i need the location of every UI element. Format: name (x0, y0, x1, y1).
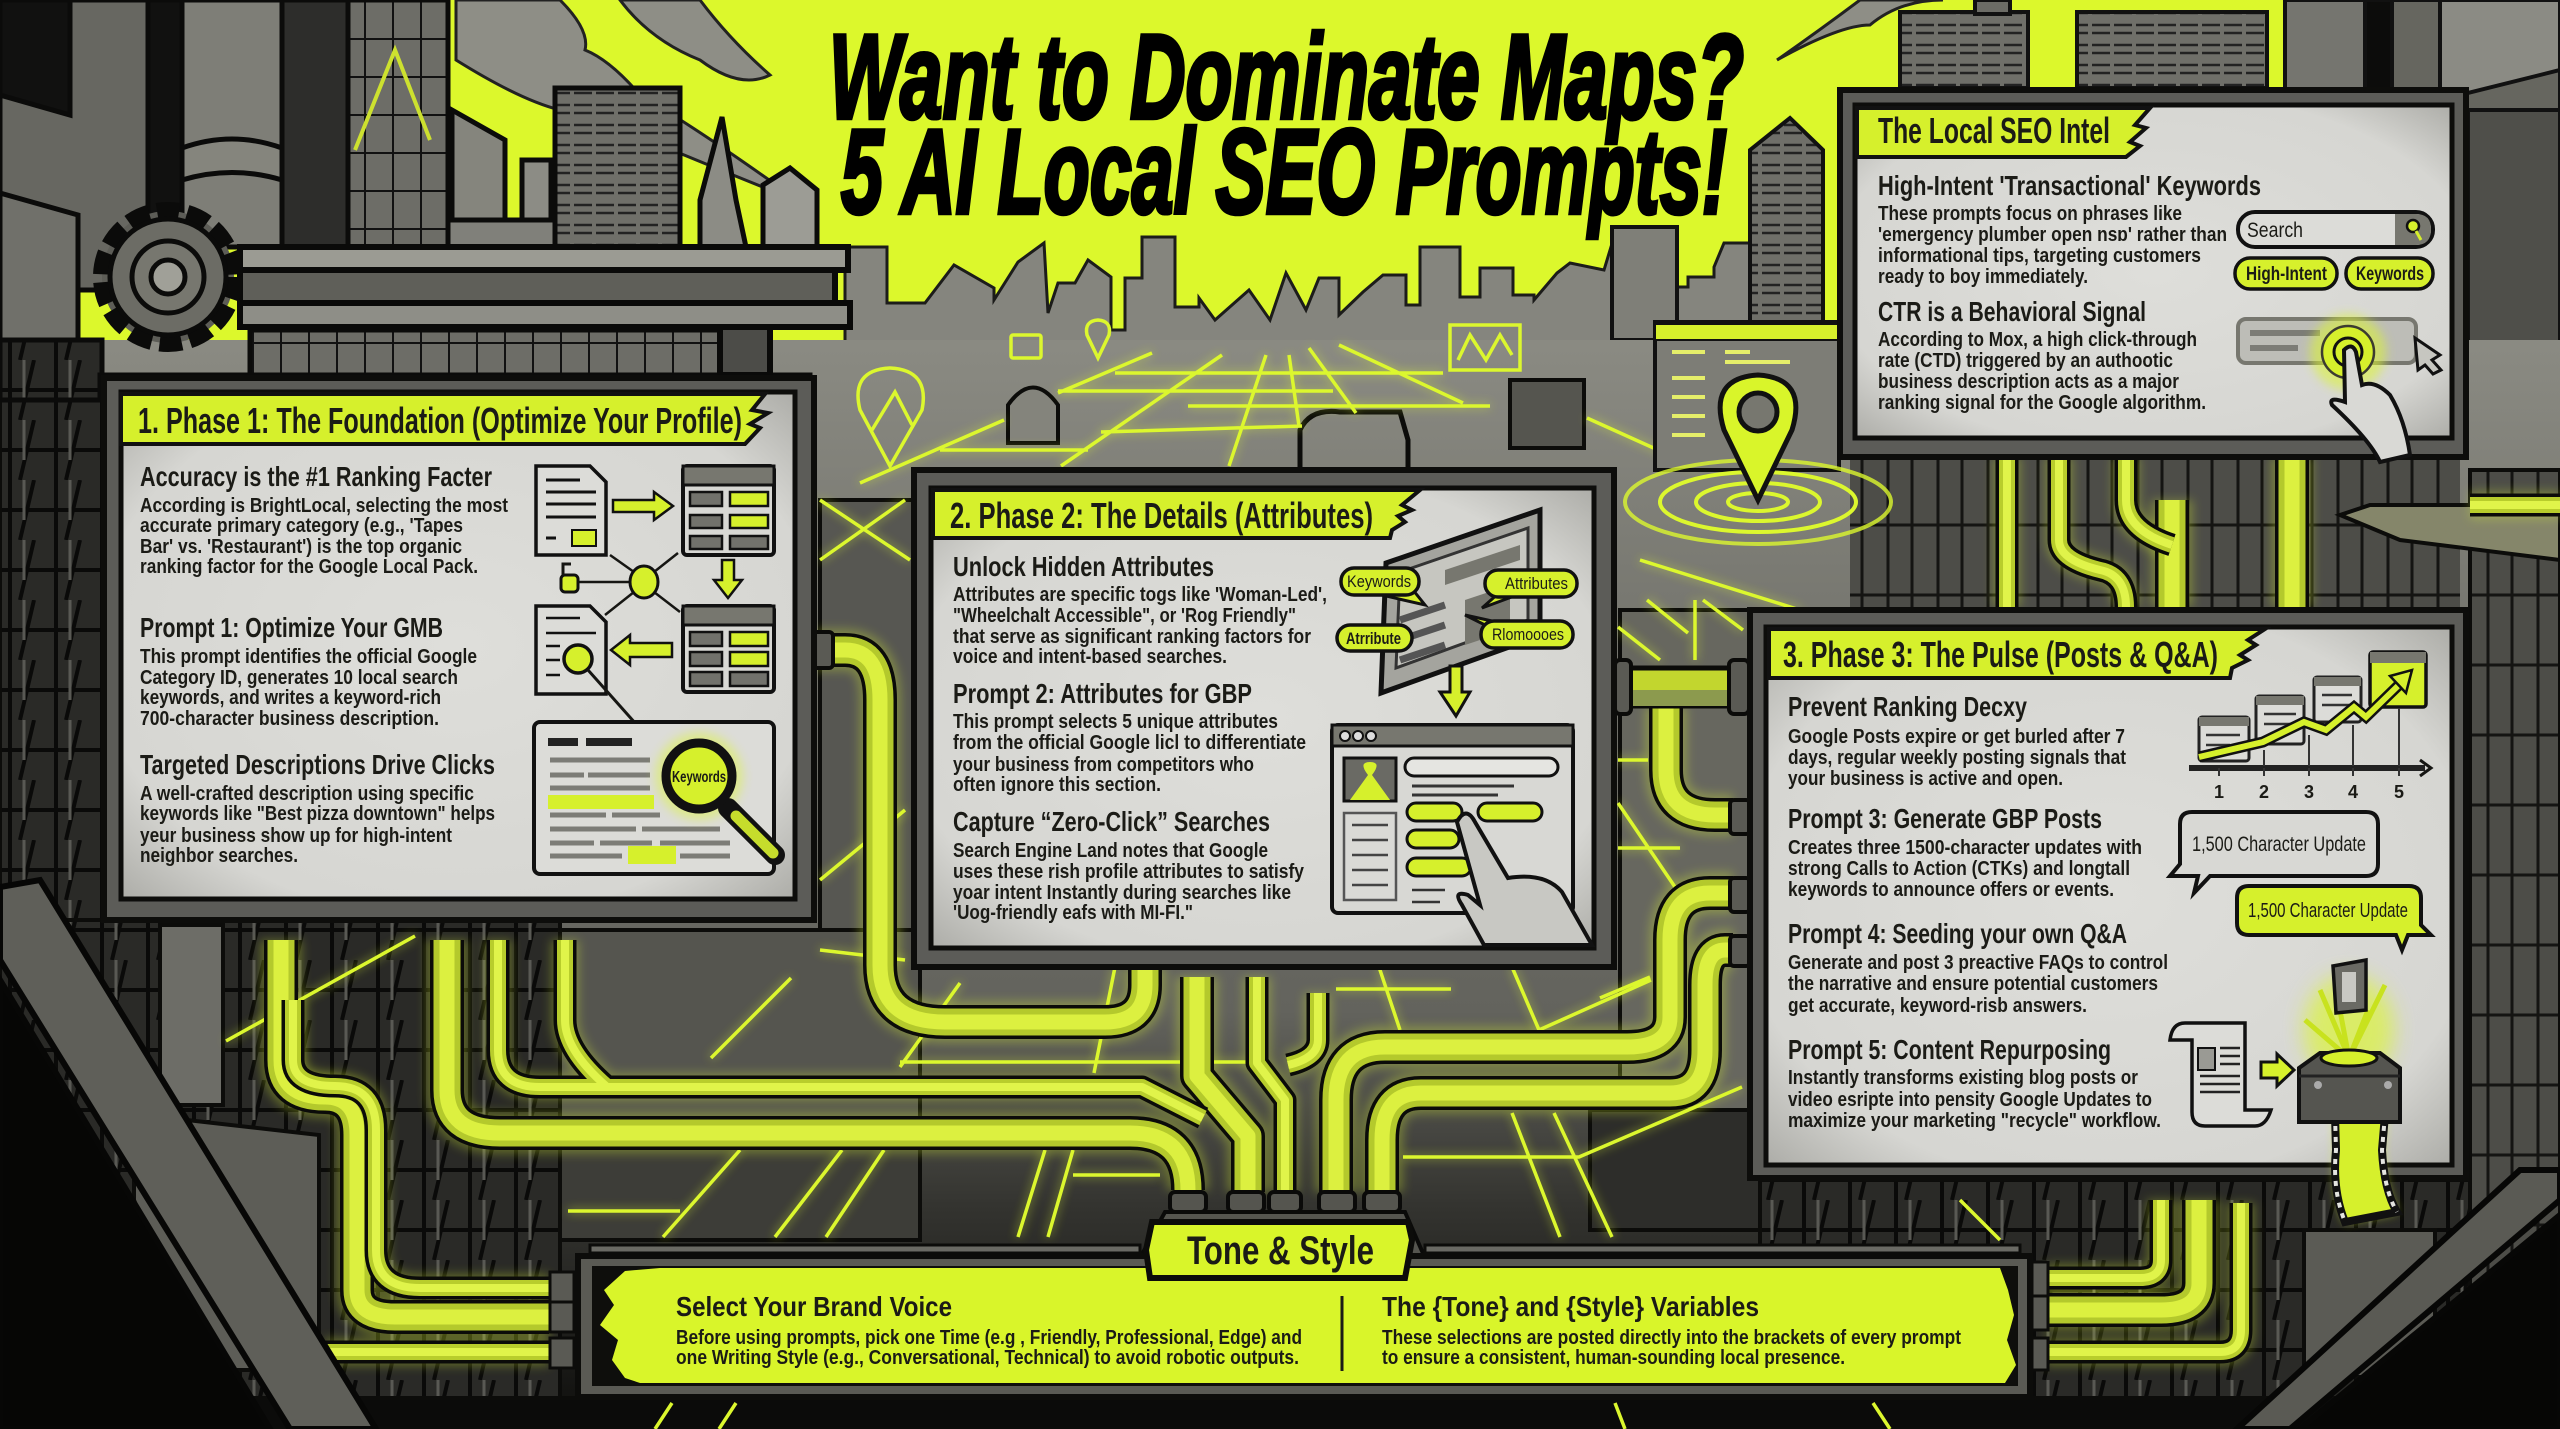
icon: profile browser with tapping hand (1332, 725, 1592, 945)
title: Want to Dominate Maps? (829, 10, 1744, 144)
text block: tone and style variables: These selections are posted directly into the brackets of every prompt (1382, 1327, 1961, 1349)
text block: Prompt 2 (953, 678, 1306, 796)
icon: click on result card (2238, 314, 2441, 462)
icon: attribute window with tag bubbles (1337, 510, 1577, 693)
text block: Prompt 4 (1788, 918, 2168, 1017)
text block: Prompt 4: Generate and post 3 preactive FAQs to control (1788, 952, 2168, 974)
text block: prevent ranking decay: days, regular weekly posting signals that (1788, 747, 2126, 769)
label: Tone & Style (1146, 1222, 1412, 1278)
text block: high-intent keywords: High-Intent 'Transactional' Keywords (1878, 170, 2261, 201)
text block: targeted descriptions: keywords like "Best pizza downtown" helps (140, 803, 495, 825)
text block: Prompt 1: keywords, and writes a keyword-rich (140, 687, 441, 709)
text block: unlock hidden attributes: that serve as significant ranking factors for (953, 626, 1311, 648)
text block: prevent ranking decay (1788, 691, 2126, 790)
chart: rising posts timeline (2189, 652, 2431, 802)
text block: accuracy ranking factor: Accuracy is the #1 Ranking Facter (140, 461, 492, 492)
text block: Prompt 5: Instantly transforms existing blog posts or (1788, 1067, 2138, 1089)
pipe manifold above tone label (1140, 1192, 1425, 1258)
panel header: The Local SEO Intel (1857, 108, 2150, 157)
yellow brush-edged band (600, 1268, 2016, 1383)
text block: Prompt 4: the narrative and ensure potential customers (1788, 973, 2158, 995)
panel header: Phase 3 (1769, 629, 2265, 678)
icon: search box (2238, 212, 2433, 247)
text block: Prompt 2: often ignore this section. (953, 774, 1161, 796)
speech bubble: 1,500 character update yellow: 1,500 Character Update (2248, 900, 2408, 922)
text block: tone and style variables (1382, 1291, 1961, 1369)
text block: accuracy ranking factor: accurate primary category (e.g., 'Tapes (140, 515, 463, 537)
text block: zero-click searches: Capture “Zero-Click” Searches (953, 806, 1270, 837)
arrow: down (1440, 666, 1470, 716)
text block: select your brand voice (676, 1291, 1302, 1369)
text block: Prompt 3: Creates three 1500-character updates with (1788, 837, 2142, 859)
text block: CTR is a behavioral signal: CTR is a Behavioral Signal (1878, 296, 2146, 327)
text block: Prompt 4: Prompt 4: Seeding your own Q&A (1788, 918, 2127, 949)
foreground girders (0, 880, 2560, 1429)
text block: tone and style variables: The {Tone} and {Style} Variables (1382, 1291, 1759, 1322)
distant city skyline (845, 227, 1751, 420)
glowing pipes (281, 457, 2560, 1352)
panel: Tone & Style bar (550, 1222, 2048, 1397)
text block: high-intent keywords: These prompts focus on phrases like (1878, 203, 2182, 225)
icon: script scroll (2170, 1023, 2271, 1126)
ground plane (0, 340, 2560, 1429)
text block: prevent ranking decay: Google Posts expire or get burled after 7 (1788, 726, 2125, 748)
panel header: Phase 1 (121, 394, 768, 444)
mid ground machinery blocks (0, 380, 2560, 1429)
text block: Prompt 4: get accurate, keyword-risb answers. (1788, 995, 2087, 1017)
text block: Prompt 5: maximize your marketing "recycle" workflow. (1788, 1110, 2161, 1132)
text block: unlock hidden attributes: "Wheelchalt Accessible", or 'Rog Friendly" (953, 605, 1296, 627)
perspective road grid lines (226, 345, 2000, 1429)
browser window behind pin (1655, 322, 1839, 470)
text block: high-intent keywords: 'emergency plumber open nsɒ' rather than (1878, 224, 2227, 246)
smoke clouds (456, 0, 1943, 202)
text block: zero-click searches: 'Uog-friendly eafs with MI-FI." (953, 902, 1193, 924)
text block: accuracy ranking factor: Bar' vs. 'Restaurant') is the top organic (140, 536, 462, 558)
title: 5 AI Local SEO Prompts! (841, 105, 1727, 239)
pipe collars on bar edges (550, 1262, 2048, 1370)
icon: attribute window with tag bubbles: Rlomoooes (1492, 625, 1564, 644)
left industrial building (0, 0, 817, 400)
title (829, 10, 1744, 239)
text block: targeted descriptions (140, 749, 495, 867)
text block: Prompt 2: Prompt 2: Attributes for GBP (953, 678, 1252, 709)
text block: high-intent keywords: informational tips, targeting customers (1878, 245, 2201, 267)
text block: Prompt 3 (1788, 803, 2142, 901)
arrow: scroll to machine (2261, 1054, 2294, 1086)
text block: accuracy ranking factor: According is BrightLocal, selecting the most (140, 495, 508, 517)
text block: CTR is a behavioral signal: According to Mox, a high click-through (1878, 329, 2197, 351)
icon: gear (102, 211, 234, 343)
text block: unlock hidden attributes (953, 551, 1327, 668)
text block: targeted descriptions: yeur business show up for high-intent (140, 825, 452, 847)
horizontal steel beam (240, 247, 850, 375)
keyword pills (2235, 258, 2433, 289)
icon: keywords magnifier on document (534, 722, 775, 874)
text block: CTR is a behavioral signal (1878, 296, 2206, 414)
text block: zero-click searches: yoar intent Instantly during searches like (953, 882, 1291, 904)
text block: Prompt 1: 700-character business description. (140, 708, 439, 730)
text block: targeted descriptions: neighbor searches. (140, 845, 298, 867)
text block: unlock hidden attributes: Attributes are specific togs like 'Woman-Led', (953, 584, 1327, 606)
icon: search box: Search (2247, 219, 2303, 242)
text block: select your brand voice: one Writing Style (e.g., Conversational, Technical) to avoid robotic outputs. (676, 1347, 1299, 1369)
text block: high-intent keywords: ready to boy immediately. (1878, 266, 2088, 288)
text block: Prompt 3: Prompt 3: Generate GBP Posts (1788, 803, 2102, 834)
text block: Prompt 3: keywords to announce offers or events. (1788, 879, 2114, 901)
chart: rising posts timeline: 3 (2304, 782, 2314, 802)
panel 3: The Pulse (1750, 610, 2466, 1222)
icon: attribute window with tag bubbles: Atrribute (1346, 629, 1401, 648)
text block: Prompt 2: This prompt selects 5 unique attributes (953, 711, 1278, 733)
panel header: The Local SEO Intel: The Local SEO Intel (1878, 110, 2110, 151)
text block: select your brand voice: Before using prompts, pick one Time (e.g , Friendly, Professional, Edge) and (676, 1327, 1302, 1349)
text block: unlock hidden attributes: Unlock Hidden Attributes (953, 551, 1214, 582)
connector pipe between panels 2 and 3 (813, 632, 1750, 966)
text block: Prompt 1: Category ID, generates 10 local search (140, 667, 458, 689)
location pin with sonar rings (1625, 375, 1891, 544)
chart: rising posts timeline: 5 (2394, 782, 2404, 802)
chart: rising posts timeline: 4 (2348, 782, 2358, 802)
text block: Prompt 1: This prompt identifies the official Google (140, 646, 477, 668)
text block: zero-click searches: Search Engine Land notes that Google (953, 840, 1268, 862)
keyword pills: High-Intent (2246, 264, 2328, 285)
top-right city towers (1612, 0, 2560, 610)
panel header: Phase 1: 1. Phase 1: The Foundation (Optimize Your Profile) (138, 400, 742, 441)
text block: Prompt 1 (140, 612, 477, 730)
text block: Prompt 5: video esripte into pensity Google Updates to (1788, 1089, 2152, 1111)
text block: tone and style variables: to ensure a consistent, human-sounding local presence. (1382, 1347, 1845, 1369)
speech bubble: 1,500 character update: 1,500 Character Update (2192, 833, 2366, 856)
text block: unlock hidden attributes: voice and intent-based searches. (953, 646, 1227, 668)
text block: accuracy ranking factor (140, 461, 508, 578)
chart: rising posts timeline: 2 (2259, 782, 2269, 802)
panel header: Phase 2 (933, 490, 1420, 538)
speech bubble: 1,500 character update yellow (2237, 886, 2431, 950)
text block: Prompt 1: Prompt 1: Optimize Your GMB (140, 612, 443, 643)
icon: keywords magnifier on document: Keywords (672, 769, 726, 786)
panel header: Phase 3: 3. Phase 3: The Pulse (Posts & Q&A) (1783, 634, 2218, 675)
panel 2: The Details (914, 470, 1614, 967)
text block: prevent ranking decay: your business is active and open. (1788, 768, 2063, 790)
text block: CTR is a behavioral signal: business description acts as a major (1878, 371, 2179, 393)
speech bubble: 1,500 character update (2170, 812, 2378, 893)
text block: CTR is a behavioral signal: ranking signal for the Google algorithm. (1878, 392, 2206, 414)
icon: repurposing machine with film strip (2299, 960, 2400, 1222)
label: Tone & Style: Tone & Style (1187, 1229, 1374, 1273)
text block: Prompt 2: your business from competitors who (953, 754, 1254, 776)
text block: Prompt 5 (1788, 1034, 2161, 1132)
panel: The Local SEO Intel (1840, 90, 2466, 462)
text block: Prompt 2: from the official Google licl to differentiate (953, 732, 1306, 754)
chart: rising posts timeline: 1 (2214, 782, 2224, 802)
icon: workflow diagram (536, 466, 774, 724)
text block: CTR is a behavioral signal: rate (CTD) triggered by an authootic (1878, 350, 2173, 372)
text block: prevent ranking decay: Prevent Ranking Decxy (1788, 691, 2027, 722)
text block: Prompt 3: strong Calls to Action (CTKs) and longtall (1788, 858, 2130, 880)
icon: attribute window with tag bubbles: Keywords (1347, 572, 1411, 591)
panel header: Phase 2: 2. Phase 2: The Details (Attributes) (950, 495, 1373, 536)
small map pins and window in the distance (858, 320, 1520, 466)
text block: accuracy ranking factor: ranking factor for the Google Local Pack. (140, 556, 478, 578)
text block: zero-click searches (953, 806, 1305, 924)
icon: attribute window with tag bubbles: Attributes (1505, 574, 1568, 593)
text block: high-intent keywords (1878, 170, 2261, 288)
text block: Prompt 5: Prompt 5: Content Repurposing (1788, 1034, 2111, 1065)
text block: zero-click searches: uses these rish profile attributes to satisfy (953, 861, 1305, 883)
keyword pills: Keywords (2356, 264, 2424, 285)
text block: targeted descriptions: Targeted Descriptions Drive Clicks (140, 749, 495, 780)
text block: targeted descriptions: A well-crafted description using specific (140, 783, 474, 805)
panel 1: The Foundation (104, 378, 814, 920)
text block: select your brand voice: Select Your Brand Voice (676, 1291, 952, 1322)
